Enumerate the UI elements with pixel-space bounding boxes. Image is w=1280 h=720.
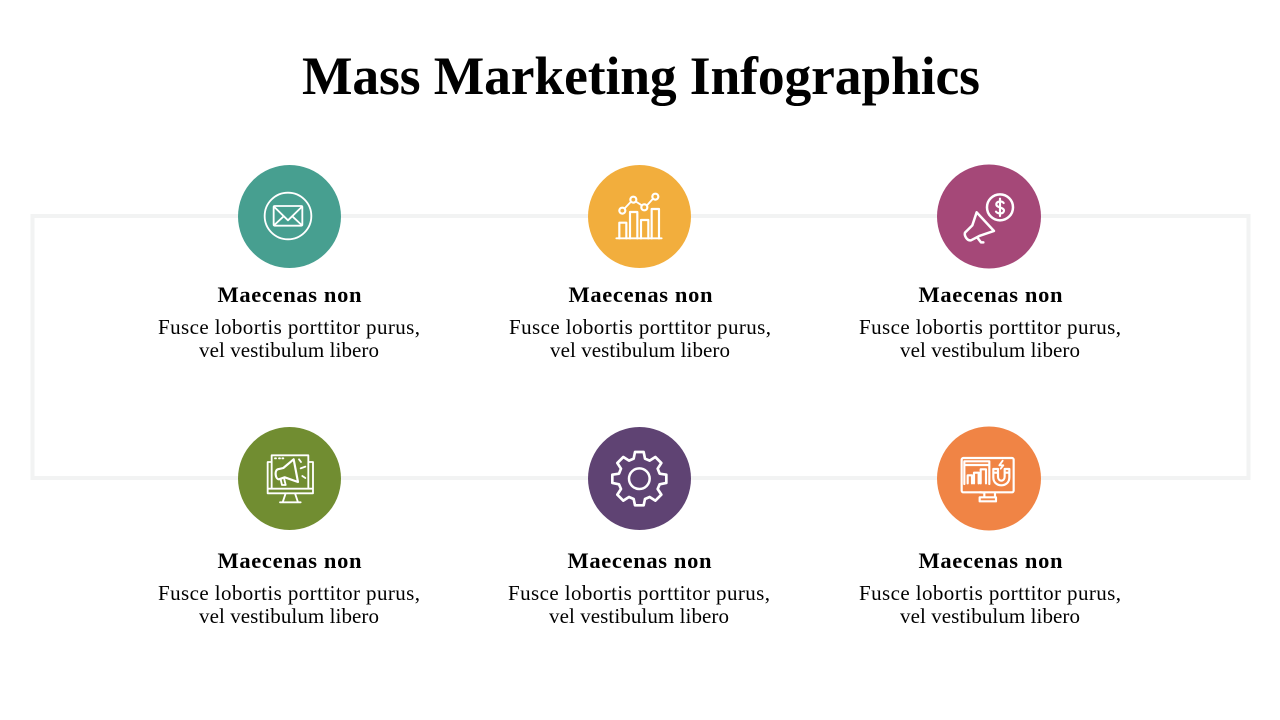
text block: vel vestibulum libero [199,604,379,628]
teal circle [238,165,341,268]
heading: Maecenas non [568,548,712,573]
text block: Fusce lobortis porttitor purus, [158,315,420,339]
panel: analytics item [509,165,771,362]
text block: Fusce lobortis porttitor purus, [509,315,771,339]
panel: paid promotion item [859,164,1121,362]
text block: vel vestibulum libero [549,604,729,628]
icon: gear [612,452,666,505]
text block [508,581,770,628]
text block [158,315,420,362]
text block: vel vestibulum libero [900,338,1080,362]
text block [509,315,771,362]
panel: email item [158,165,420,362]
icon: envelope [265,193,311,239]
text block: vel vestibulum libero [900,604,1080,628]
icon: bar chart with trend line [616,194,662,238]
text block: vel vestibulum libero [550,338,730,362]
heading: Maecenas non [918,282,1063,307]
magenta circle [937,164,1041,268]
heading: Maecenas non [568,282,713,307]
text block: Fusce lobortis porttitor purus, [158,581,420,605]
text block: Fusce lobortis porttitor purus, [859,581,1121,605]
panel: settings item [508,427,770,628]
heading: Maecenas non [918,548,1063,573]
green circle [238,427,341,530]
amber circle [588,165,691,268]
panel: lead generation item [859,426,1121,628]
connector frame [32,216,1248,478]
icon: monitor with chart and magnet [962,458,1014,501]
icon: monitor with megaphone [268,455,313,502]
heading: Maecenas non [218,548,362,573]
orange circle [937,426,1041,530]
panel: online advertising item [158,427,420,628]
heading: Maecenas non [218,282,362,307]
text block: Fusce lobortis porttitor purus, [508,581,770,605]
text block [859,315,1121,362]
purple circle [588,427,691,530]
text block: Fusce lobortis porttitor purus, [859,315,1121,339]
text block [158,581,420,628]
text block: vel vestibulum libero [199,338,379,362]
text block [859,581,1121,628]
icon: megaphone with dollar coin [965,194,1013,242]
title: Mass Marketing Infographics [302,46,980,106]
